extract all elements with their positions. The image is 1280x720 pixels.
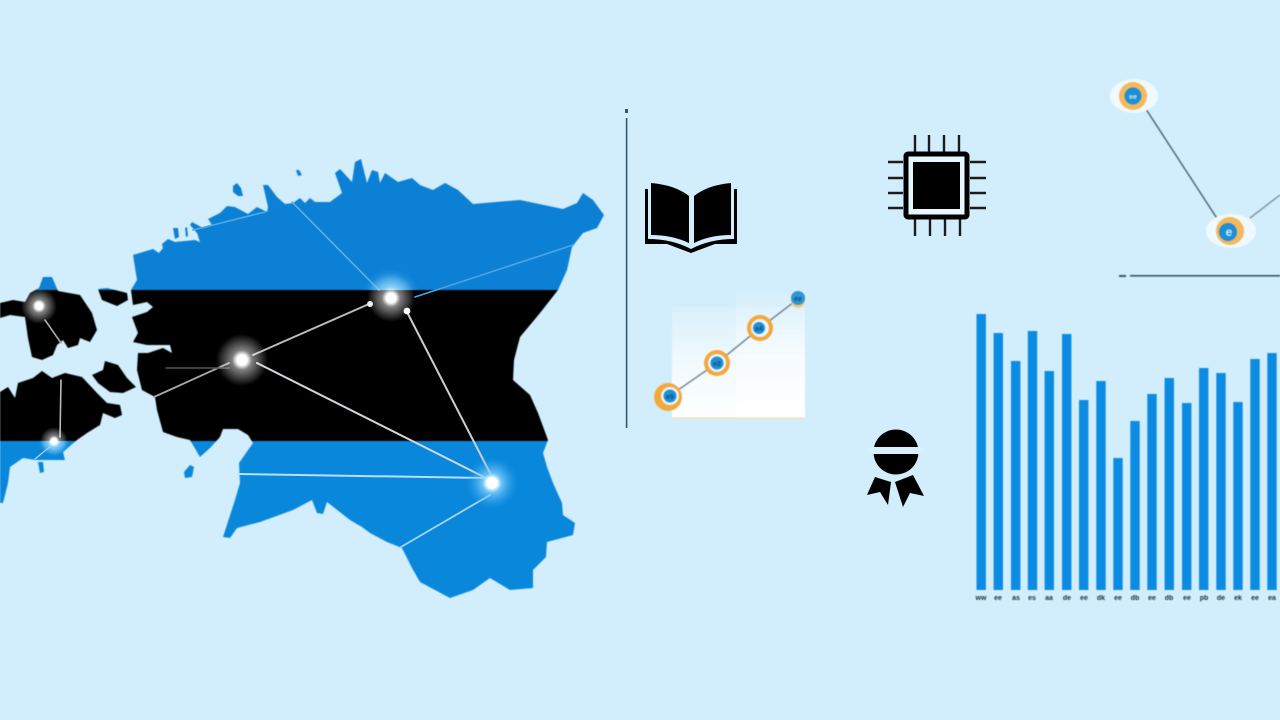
chart data nodes: e2 xyxy=(713,361,721,368)
graph lines xyxy=(1142,103,1280,223)
chart data nodes xyxy=(654,291,805,411)
bar labels: aa xyxy=(1045,595,1053,602)
line chart on white panel xyxy=(654,290,805,419)
bar labels: ee xyxy=(1148,595,1156,602)
bar labels: dk xyxy=(1097,595,1105,602)
bar labels: ee xyxy=(1251,595,1259,602)
top right line graph xyxy=(1110,79,1280,277)
graph node top: ee xyxy=(1129,94,1137,101)
chart data nodes: ee xyxy=(794,296,802,303)
bar labels: ee xyxy=(994,595,1002,602)
bar labels: pb xyxy=(1200,595,1208,602)
icon: open book xyxy=(645,183,737,253)
graph axis xyxy=(1119,275,1280,277)
bar labels: de xyxy=(1063,595,1071,602)
network connection lines xyxy=(35,202,573,547)
bar labels: ee xyxy=(1183,595,1191,602)
bar chart xyxy=(975,314,1277,602)
graph node bottom xyxy=(1206,214,1256,248)
bar labels: es xyxy=(1028,595,1036,602)
network glow nodes xyxy=(21,268,518,509)
graph node top xyxy=(1110,79,1158,113)
icon: award ribbon xyxy=(867,430,924,507)
bar labels: ea xyxy=(1268,595,1276,602)
bar labels xyxy=(975,595,1276,602)
map: flag stripes clipped to country outline xyxy=(0,150,620,611)
bar labels: ww xyxy=(975,595,987,602)
chart panel xyxy=(672,290,805,419)
graph node bottom: e xyxy=(1226,225,1233,239)
chart trend line xyxy=(668,299,798,397)
bar labels: ek xyxy=(1234,595,1242,602)
vertical axis line xyxy=(625,109,628,428)
bar labels: as xyxy=(1012,595,1020,602)
map of Estonia in flag colours with network xyxy=(0,150,620,611)
icon: microchip xyxy=(888,135,986,236)
bars xyxy=(976,314,1277,590)
chart data nodes: e9 xyxy=(666,394,674,401)
chart data nodes: e4 xyxy=(755,326,763,333)
bar labels: de xyxy=(1217,595,1225,602)
bar labels: db xyxy=(1131,595,1139,602)
bar labels: ee xyxy=(1080,595,1088,602)
bar labels: ee xyxy=(1114,595,1122,602)
bar labels: db xyxy=(1165,595,1173,602)
